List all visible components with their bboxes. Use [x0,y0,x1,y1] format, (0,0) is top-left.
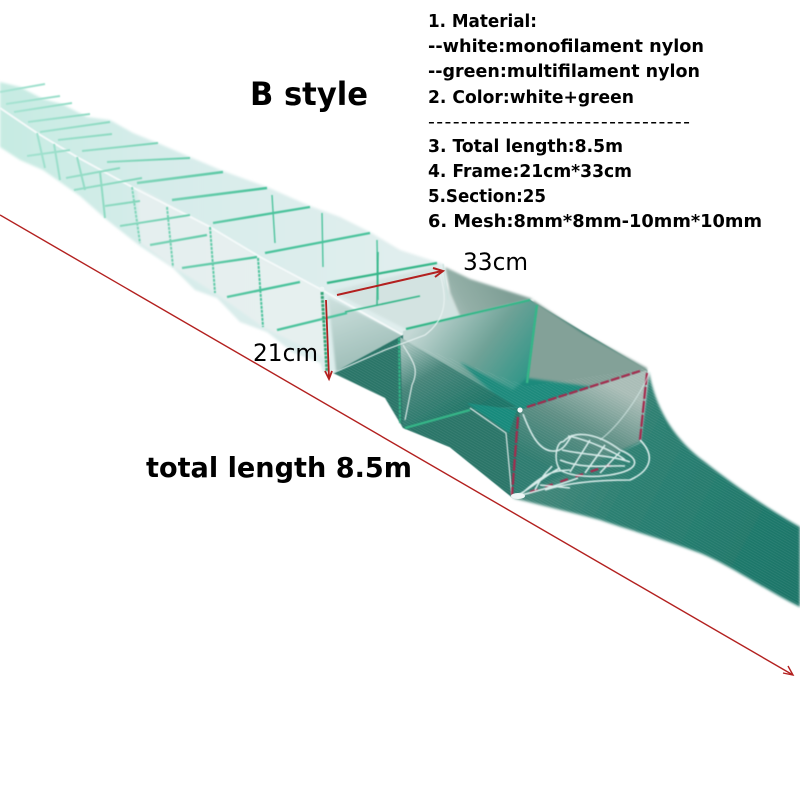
green frame two and first frame edges [322,252,537,428]
specification list [428,11,762,232]
near side panel [400,337,517,427]
mid grey mesh sections [407,267,647,442]
dark base under middle of net [333,300,647,498]
specification list: 2. Color:white+green [428,87,634,108]
tapered cone tail [513,372,800,607]
specification list: --white:monofilament nylon [428,36,704,57]
fishing net trap [0,82,800,607]
red frame opening [513,370,647,497]
light section of net [0,82,460,372]
title: B style: B style [250,75,368,113]
specification list: -------------------------------- [428,111,690,133]
specification list: 4. Frame:21cm*33cm [428,161,632,182]
second frame opening [403,300,537,410]
label: 21cm: 21cm [253,339,318,367]
specification list: 1. Material: [428,11,537,32]
arrow: 21cm height [325,300,332,379]
coiled white rope [514,372,650,497]
white frame ropes [333,266,512,497]
lower dark green panel [403,408,512,497]
specification list: 3. Total length:8.5m [428,136,623,157]
specification list: 6. Mesh:8mm*8mm-10mm*10mm [428,211,762,232]
label: 33cm: 33cm [463,248,528,276]
rope knots [320,287,525,499]
label: total length: total length 8.5m [146,451,412,484]
red frame bars [512,371,647,495]
dark interior funnel [460,362,593,410]
arrow: total length [0,215,793,675]
specification list: --green:multifilament nylon [428,61,700,82]
ridge rope along top of net [0,108,520,410]
specification list: 5.Section:25 [428,186,546,207]
arrow: 33cm width [337,268,443,295]
green frame lines on light section [0,84,378,330]
